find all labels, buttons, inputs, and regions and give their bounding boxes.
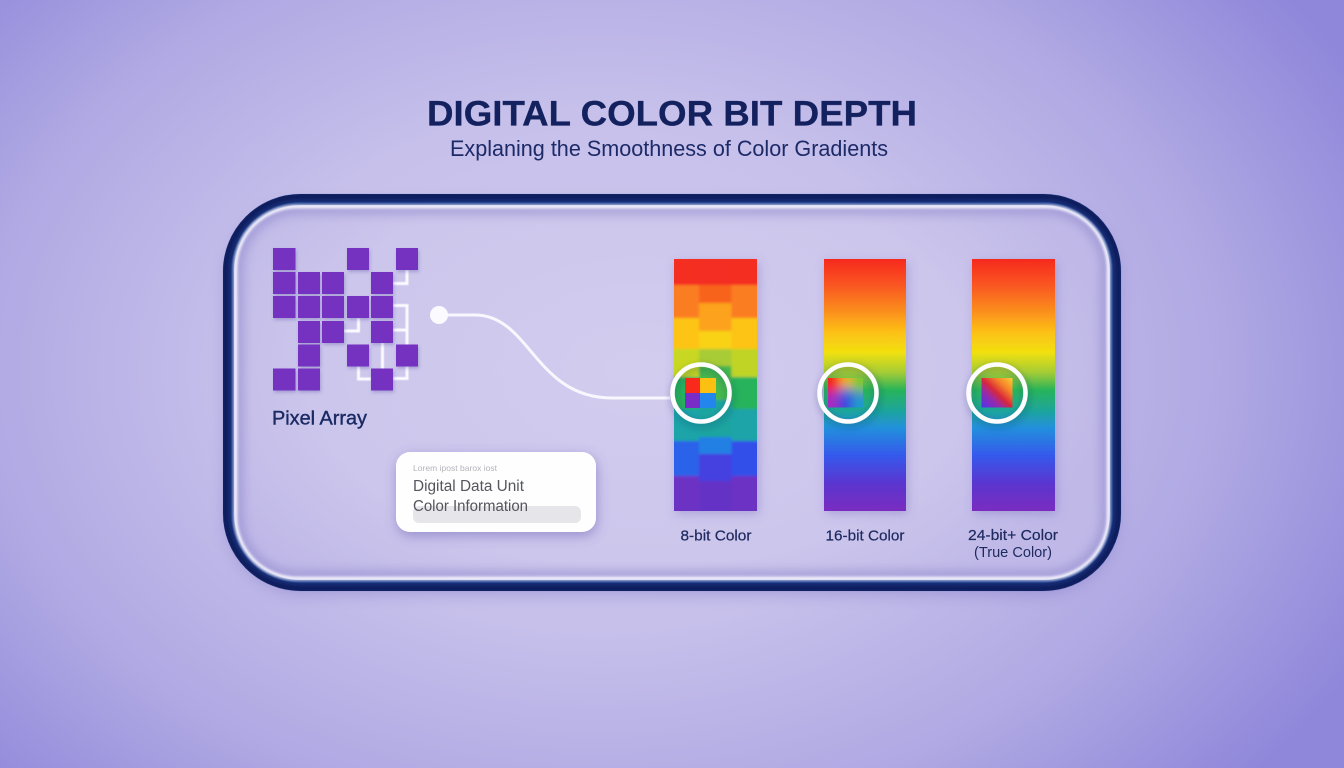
magnifier: 8-bit xyxy=(672,364,730,422)
pixel cells xyxy=(273,248,418,390)
panel: rounded frame xyxy=(226,196,1118,592)
label: 24-bit true color: 24-bit+ Color xyxy=(968,527,1058,544)
card line one: Digital Data Unit xyxy=(413,478,525,495)
16-bit swatch xyxy=(828,378,863,408)
bar: 24-bit xyxy=(972,259,1055,511)
24-bit swatch xyxy=(982,378,1012,408)
pixel array xyxy=(273,248,418,390)
label: pixel array: Pixel Array xyxy=(272,408,367,430)
title: DIGITAL COLOR BIT DEPTH xyxy=(427,94,917,134)
8-bit middle column xyxy=(699,249,732,521)
bar: 8-bit xyxy=(672,258,763,518)
magnifier: 16-bit xyxy=(818,364,876,422)
card highlight bar xyxy=(413,506,581,523)
card caption: Lorem ipost barox iost xyxy=(413,463,498,473)
card line two: Color Information xyxy=(413,498,528,515)
8-bit left column xyxy=(674,259,702,478)
subtitle: Explaning the Smoothness of Color Gradients xyxy=(450,136,888,161)
label: 16-bit: 16-bit Color xyxy=(826,528,904,544)
8-bit swatch xyxy=(685,378,716,408)
callout card xyxy=(396,452,596,532)
8-bit right column xyxy=(730,259,757,477)
connector arrow xyxy=(430,306,670,398)
label: 24-bit true color: (True Color) xyxy=(974,544,1052,561)
bar: 16-bit xyxy=(824,259,906,511)
label: 8-bit: 8-bit Color xyxy=(680,528,752,544)
label: 24-bit true color xyxy=(968,527,1058,561)
pixel connectors xyxy=(344,270,407,379)
magnifier: 24-bit xyxy=(968,364,1026,422)
